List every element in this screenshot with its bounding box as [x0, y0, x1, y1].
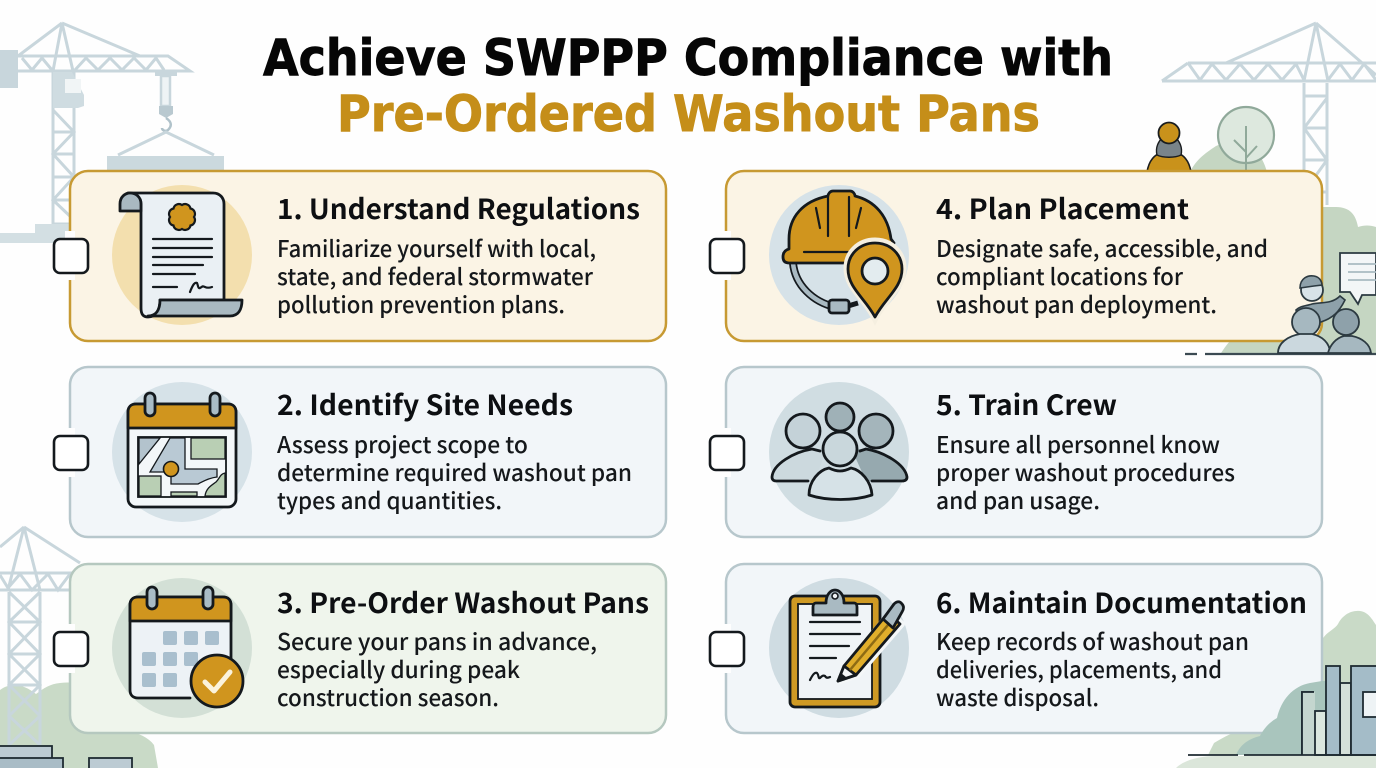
text: step 2 [277, 384, 632, 516]
background: top-left crane [0, 23, 224, 243]
text: step 6: 6. Maintain Documentation [936, 582, 1307, 622]
text: step 5: proper washout procedures [936, 454, 1235, 488]
text: step 5: Ensure all personnel know [936, 426, 1220, 460]
text: step 1: Familiarize yourself with local, [277, 230, 596, 264]
panel: 6. Maintain Documentation [710, 564, 1322, 733]
icon: hard hat with location pin [769, 185, 909, 325]
text: step 3: especially during peak [277, 651, 520, 685]
text: step 6 [936, 582, 1307, 713]
panel: 2. Identify Site Needs [54, 367, 666, 537]
icon: clipboard with pencil [769, 578, 909, 718]
text: step 3: Secure your pans in advance, [277, 623, 597, 657]
text: step 2: determine required washout pan [277, 454, 632, 488]
checkbox 1 [54, 231, 88, 280]
text: step 6: deliveries, placements, and [936, 651, 1222, 685]
text: step 2: types and quantities. [277, 482, 502, 516]
text: step 5: and pan usage. [936, 482, 1100, 516]
text: step 1 [277, 188, 640, 320]
title: Achieve SWPPP Compliance with [263, 29, 1113, 87]
panel: 3. Pre-Order Washout Pans [54, 564, 666, 733]
panel: 5. Train Crew [710, 367, 1322, 537]
text: step 5 [936, 384, 1235, 516]
checkbox 2 [54, 428, 88, 477]
background: top-right crane [1162, 23, 1376, 205]
text: step 1: pollution prevention plans. [277, 286, 565, 320]
foreground: workers overlapping card 4 [1278, 276, 1371, 353]
text: step 1: state, and federal stormwater [277, 258, 594, 292]
text: step 5: 5. Train Crew [936, 384, 1117, 424]
text: step 4 [936, 188, 1268, 320]
text: step 4: 4. Plan Placement [936, 188, 1189, 228]
checkbox 6 [710, 624, 744, 673]
background: lower-right green bush [1176, 611, 1376, 768]
text: step 2: Assess project scope to [277, 426, 528, 460]
text: step 2: 2. Identify Site Needs [277, 384, 573, 424]
icon: crew of four people [769, 382, 909, 522]
text: step 4: washout pan deployment. [936, 286, 1217, 320]
icon: regulation scroll [112, 185, 252, 325]
checkbox 4 [710, 231, 744, 280]
background: right bushes [1185, 207, 1376, 355]
checkbox 3 [54, 624, 88, 673]
text: step 4: Designate safe, accessible, and [936, 230, 1268, 264]
foreground: teal bush and buildings overlapping card 6 [1188, 666, 1376, 755]
title [263, 29, 1113, 143]
panel: 1. Understand Regulations [54, 171, 666, 341]
text: step 1: 1. Understand Regulations [277, 188, 640, 228]
title: Pre-Ordered Washout Pans [337, 85, 1040, 143]
icon: calendar with check mark [112, 578, 252, 718]
checkbox 5 [710, 428, 744, 477]
text: step 3 [277, 582, 649, 713]
text: step 4: compliant locations for [936, 258, 1184, 292]
icon: calendar with site map [112, 382, 252, 522]
background: person and tree behind card 4 [1147, 107, 1274, 172]
text: step 3: 3. Pre-Order Washout Pans [277, 582, 649, 622]
text: step 6: Keep records of washout pan [936, 623, 1249, 657]
text: step 3: construction season. [277, 679, 499, 713]
background: lower-left crane and bush [0, 527, 158, 768]
panel: 4. Plan Placement [710, 171, 1322, 341]
text: step 6: waste disposal. [936, 679, 1099, 713]
